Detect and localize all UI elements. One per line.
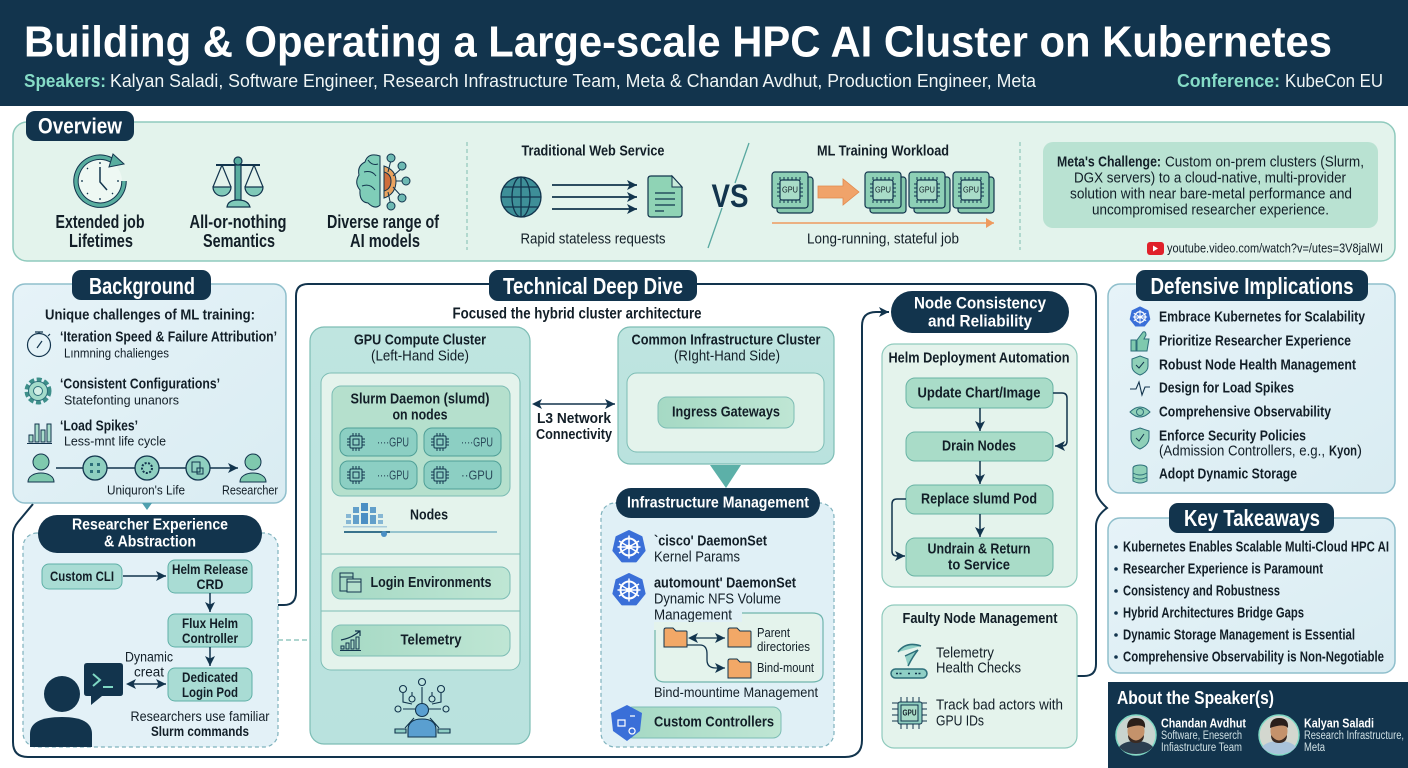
telemetry text (936, 644, 1021, 676)
custom controllers (611, 705, 781, 741)
conference: Conference: (1177, 71, 1280, 91)
login environments bar (332, 567, 510, 599)
gpu cell 2: ····GPU (461, 434, 493, 450)
step: replace slumd pod: Replace slumd Pod (921, 490, 1037, 508)
traditional web service diagram (501, 142, 682, 248)
overview item: diverse range (327, 212, 440, 251)
bind-mount caption: Bind-mountime Management (654, 684, 818, 700)
automount daemonset (654, 574, 796, 624)
panel: defensive implications (1108, 270, 1395, 493)
icon: clock (76, 154, 124, 205)
icon: health gauge (891, 644, 927, 678)
telemetry text: Telemetry (936, 644, 994, 662)
VS divider: VS (712, 178, 748, 214)
challenge: iteration speed: ‘Iteration Speed & Failure Attribution’ (60, 328, 277, 346)
overview item: extended job: Extended job (56, 212, 144, 232)
icon: kubernetes (613, 531, 645, 561)
bind-mount diagram: Parent (757, 626, 790, 640)
heading: technical deep dive: Technical Deep Dive (503, 273, 683, 299)
challenge: consistent configurations: ‘Consistent Configurations’ (60, 376, 220, 392)
nodes row: Nodes (410, 506, 448, 524)
item: dynamic storage: Adopt Dynamic Storage (1159, 466, 1297, 482)
box: flux helm controller: Flux Helm (182, 615, 238, 631)
L3 network connectivity (534, 404, 615, 443)
panel: about the speakers (1108, 682, 1408, 768)
telemetry bar (332, 625, 510, 656)
login environments bar: Login Environments (370, 575, 492, 591)
panel: GPU compute cluster: GPU Compute Cluster (354, 332, 486, 348)
title: Building & Operating a Large-scale HPC AI Cluster on Kubernetes (24, 18, 1332, 66)
automount daemonset: Dynamic NFS Volume (654, 590, 781, 608)
ingress gateways: Ingress Gateways (672, 404, 780, 420)
telemetry bar: Telemetry (400, 632, 462, 648)
icon: gear (26, 380, 50, 402)
item: kubernetes (1130, 307, 1366, 326)
overview item: all-or-nothing: All-or-nothing (190, 212, 286, 232)
track bad actors text: GPU IDs (936, 712, 984, 730)
dynamic create label: creat (134, 664, 164, 680)
icon: researcher silhouette (30, 676, 92, 747)
challenge: consistent configurations (60, 376, 220, 408)
request arrows (552, 185, 637, 209)
gpu cell 4 (424, 461, 501, 489)
ML training workload diagram (772, 142, 994, 248)
item: kubernetes: Embrace Kubernetes for Scalability (1159, 308, 1366, 326)
researcher caption: Slurm commands (151, 723, 249, 739)
callout: Meta's challenge (1043, 142, 1378, 228)
box: dedicated login pod: Login Pod (182, 684, 238, 700)
researcher heading: Researcher Experience (72, 516, 228, 534)
step: undrain: to Service (948, 556, 1010, 574)
slurm daemon block: on nodes (392, 406, 448, 424)
speaker: Chandan: Chandan Avdhut (1161, 716, 1247, 730)
connector lines (13, 284, 1107, 757)
speaker: Kalyan: Meta (1304, 742, 1325, 754)
item: researcher experience: Prioritize Researcher Experience (1159, 332, 1351, 350)
speakers line: Kalyan Saladi, Software Engineer, Research Infrastructure Team, Meta & Chandan Avdhut, Production Engineer, Meta (110, 71, 1037, 91)
panel: faulty node management: Faulty Node Management (902, 611, 1058, 627)
speaker: Chandan: Software, Eneserch (1161, 730, 1242, 742)
photo: Chandan (1116, 715, 1156, 755)
icon: GPU chip: GPU (902, 708, 917, 718)
track bad actors text (936, 696, 1063, 730)
gpu cell 4: ··GPU (461, 468, 493, 482)
panel: researcher experience (23, 515, 278, 747)
panel: background: Unique challenges of ML training: (45, 306, 255, 324)
panel: GPU compute cluster (310, 327, 530, 744)
item: security policies: ) (1357, 442, 1362, 460)
panel: helm deployment automation (882, 344, 1077, 587)
lifecycle flow: Researcher (222, 482, 279, 498)
ML training workload diagram: ML Training Workload (817, 142, 949, 160)
item: security policies: Enforce Security Policies (1159, 428, 1306, 444)
traditional web service diagram: Rapid stateless requests (520, 230, 666, 248)
item: security policies (1131, 428, 1362, 460)
box: helm release crd: Helm Release (172, 561, 248, 577)
header banner (0, 0, 1408, 106)
icon: kubernetes (613, 574, 645, 604)
panel: about the speakers: About the Speaker(s) (1117, 688, 1274, 708)
automount daemonset: automount' DaemonSet (654, 574, 796, 592)
box: custom cli (42, 564, 122, 589)
panel: common infrastructure cluster (618, 327, 834, 464)
item: security policies: (Admission Controllers, e.g., (1159, 442, 1325, 460)
ingress gateways (658, 397, 794, 428)
icon: stopwatch (28, 332, 50, 356)
gpu cell 3 (340, 461, 417, 489)
small pointer (142, 503, 152, 510)
box: helm release crd (168, 560, 252, 593)
panel: infrastructure management (601, 488, 834, 747)
helm arrows (892, 393, 1067, 556)
box: flux helm controller (168, 614, 252, 647)
step: undrain (906, 538, 1053, 576)
panel: overview (13, 111, 1395, 261)
track bad actors text: Track bad actors with (936, 696, 1063, 714)
conference (1177, 71, 1383, 91)
item: researcher experience (1131, 332, 1351, 351)
photo: Kalyan (1259, 715, 1299, 755)
item: observability: Comprehensive Observability (1159, 404, 1332, 420)
item: load spikes: Design for Load Spikes (1159, 380, 1294, 396)
box: dedicated login pod (168, 668, 252, 701)
gpu cell 2 (424, 428, 501, 456)
speaker: Kalyan (1304, 716, 1404, 754)
cisco daemonset: Kernel Params (654, 548, 740, 566)
takeaways list: Consistency and Robustness (1123, 582, 1280, 600)
lifecycle flow (28, 454, 279, 498)
icon: globe (501, 177, 541, 217)
researcher caption (130, 708, 270, 739)
box: custom cli: Custom CLI (50, 568, 114, 584)
slurm daemon block (332, 386, 510, 496)
item: node health (1132, 356, 1356, 375)
icon: terminal bubble (84, 663, 123, 705)
challenge: iteration speed (60, 328, 277, 360)
overview item: all-or-nothing: Semantics (203, 231, 275, 251)
item: security policies: Kyon (1329, 442, 1357, 460)
callout: Meta's challenge: Meta's Challenge: (1057, 154, 1161, 170)
nodes row (343, 503, 497, 537)
overview item: all-or-nothing (190, 212, 286, 251)
cisco daemonset: `cisco' DaemonSet (654, 532, 767, 550)
cisco daemonset (654, 532, 767, 566)
takeaways heading: Key Takeaways (1184, 505, 1320, 531)
dynamic create label (125, 650, 173, 680)
item: node health: Robust Node Health Management (1159, 356, 1356, 374)
traditional web service diagram: Traditional Web Service (522, 142, 664, 160)
item: dynamic storage (1133, 465, 1297, 483)
slurm daemon block: Slurm Daemon (slumd) (350, 390, 490, 408)
ML training workload diagram: Long-running, stateful job (807, 230, 959, 248)
heading: node consistency (891, 291, 1069, 333)
lifecycle flow: Uniquron's Life (107, 482, 185, 498)
icon: scales (213, 157, 263, 207)
bind-mount diagram: directories (757, 640, 810, 654)
icon: document (648, 176, 682, 217)
researcher heading: & Abstraction (104, 534, 196, 550)
heading: node consistency: and Reliability (928, 312, 1032, 330)
overview item: diverse range: Diverse range of (327, 212, 440, 232)
icon: GPU chip (892, 697, 927, 729)
challenge: load spikes: ‘Load Spikes’ (60, 418, 138, 434)
conference: KubeCon EU (1285, 71, 1383, 91)
icon: brain (357, 154, 410, 210)
callout: Meta's challenge: solution with near bare-metal performance and (1070, 186, 1352, 202)
L3 network connectivity: Connectivity (536, 427, 612, 443)
takeaways list (1114, 538, 1389, 666)
panel: key takeaways (1108, 503, 1395, 673)
gpu cell 3: ····GPU (377, 468, 409, 482)
step: update chart (906, 378, 1053, 408)
overview item: extended job: Lifetimes (69, 231, 133, 251)
speakers line: Speakers: (24, 71, 106, 91)
researcher heading (38, 515, 262, 553)
challenge: iteration speed: Lınmning chalienges (64, 346, 169, 360)
step: drain nodes: Drain Nodes (942, 438, 1016, 454)
takeaways list: Hybrid Architectures Bridge Gaps (1123, 604, 1304, 622)
custom controllers: Custom Controllers (654, 714, 774, 730)
gpu cell 1 (340, 428, 417, 456)
bind-mount diagram: Bind-mount (757, 661, 814, 675)
telemetry text: Health Checks (936, 660, 1021, 676)
orange arrow (818, 179, 859, 205)
panel: faulty node management (882, 605, 1077, 748)
speaker: Chandan: Infiastructure Team (1161, 742, 1242, 754)
gpu cell 1: ····GPU (377, 434, 409, 450)
defensive heading: Defensive Implications (1150, 273, 1354, 299)
step: drain nodes (906, 432, 1053, 461)
panel: helm deployment automation: Helm Deployment Automation (888, 350, 1070, 366)
takeaways list: Researcher Experience is Paramount (1123, 560, 1323, 578)
step: undrain: Undrain & Return (928, 540, 1030, 558)
overview heading: Overview (38, 114, 123, 138)
box: flux helm controller: Controller (182, 630, 238, 646)
step: replace slumd pod (906, 485, 1053, 514)
background heading: Background (89, 273, 195, 299)
VS divider (708, 143, 749, 248)
technical subtitle: Focused the hybrid cluster architecture (452, 306, 702, 322)
infrastructure heading: Infrastructure Management (627, 494, 810, 512)
icon: AI researcher (395, 678, 450, 737)
challenge: consistent configurations: Statefonting unanors (64, 392, 179, 408)
callout: Meta's challenge: uncompromised researcher experience. (1092, 202, 1329, 218)
callout: Meta's challenge: DGX servers) to a cloud-native, multi-provider (1074, 170, 1346, 186)
flow arrows (123, 576, 210, 684)
inner cluster container (321, 373, 520, 670)
L3 network connectivity: L3 Network (537, 411, 612, 427)
infrastructure heading (616, 488, 820, 518)
box: helm release crd: CRD (196, 576, 224, 592)
icon: bars (27, 424, 52, 444)
panel: common infrastructure cluster: (RIght-Hand Side) (674, 348, 780, 364)
panel: background (13, 270, 286, 510)
bind-mount diagram (654, 613, 823, 682)
panel: GPU compute cluster: (Left-Hand Side) (371, 348, 469, 364)
panel: common infrastructure cluster: Common Infrastructure Cluster (632, 332, 821, 348)
speaker: Chandan (1161, 716, 1247, 754)
pointer triangle (710, 465, 741, 488)
overview item: extended job (56, 212, 144, 251)
challenge: load spikes: Less-mnt life cycle (64, 434, 166, 448)
overview item: diverse range: AI models (350, 231, 420, 251)
automount daemonset: Management (654, 606, 733, 624)
box: dedicated login pod: Dedicated (182, 669, 238, 685)
dynamic create label: Dynamic (125, 650, 173, 664)
researcher caption: Researchers use familiar (130, 708, 270, 724)
step: update chart: Update Chart/Image (918, 384, 1040, 402)
speaker: Kalyan: Kalyan Saladi (1304, 716, 1374, 730)
heading: node consistency: Node Consistency (914, 294, 1046, 312)
item: load spikes (1130, 380, 1294, 396)
challenge: load spikes (60, 418, 166, 448)
callout: Meta's challenge: Custom on-prem clusters (Slurm, (1165, 154, 1364, 170)
